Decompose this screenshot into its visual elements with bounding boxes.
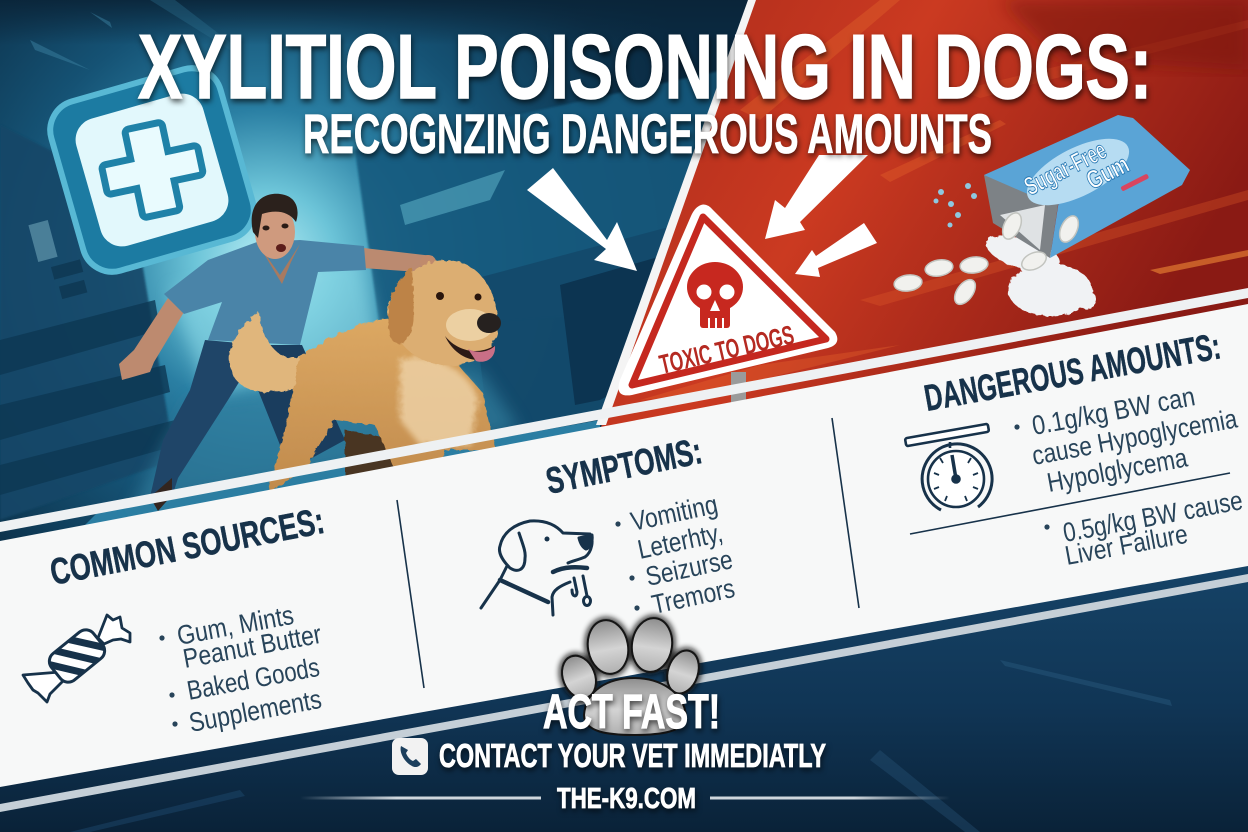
sugar crumbs [934, 183, 977, 228]
list: Peanut Butter [181, 619, 324, 674]
list: 0.1g/kg BW can [1030, 381, 1197, 441]
diagonal divider [596, 0, 756, 425]
list: Hypolglycema [1045, 442, 1191, 498]
heading: SYMPTOMS: [542, 430, 705, 502]
arrow: pointing to sign from top right [765, 155, 868, 239]
list: Leterhty, [635, 518, 725, 565]
illustration: sugar-free gum packet: Sugar-Free [1019, 135, 1111, 201]
panel: common sources [23, 500, 327, 738]
call to action: ACT FAST! [543, 686, 720, 739]
list: Tremors [649, 573, 737, 620]
right red scene background [600, 0, 1248, 430]
illustration: sugar-free gum packet [893, 115, 1190, 316]
icon: sign post [731, 372, 746, 408]
panel: dangerous amounts [905, 325, 1245, 571]
sign label: TOXIC TO DOGS [657, 320, 797, 380]
contact line: CONTACT YOUR VET IMMEDIATLY [439, 737, 826, 774]
top stripe of info panel [0, 288, 1248, 532]
website: THE-K9.COM [557, 783, 696, 815]
bottom navy band [0, 555, 1248, 832]
list: Gum, Mints [175, 600, 296, 651]
illustration: sugar-free gum packet: Gum [1081, 149, 1134, 195]
heading: COMMON SOURCES: [47, 500, 327, 593]
icon: skull [687, 262, 743, 329]
list [615, 489, 737, 620]
arrow: pointing to sign from left [527, 168, 637, 271]
list: Seizurse [643, 544, 735, 592]
list: Liver Failure [1063, 519, 1190, 571]
list: Baked Goods [185, 652, 322, 706]
dog face [436, 292, 501, 362]
info panel [0, 304, 1248, 787]
icon: drooling dog [481, 521, 592, 615]
list: Vomiting [628, 489, 720, 537]
icon: silver paw [552, 612, 708, 735]
panel: symptoms [481, 430, 737, 620]
icon: phone [392, 738, 428, 775]
icon: kitchen scale [905, 424, 992, 510]
arrow: pointing to sign from right [795, 223, 877, 277]
icon: candy [23, 615, 130, 702]
illustration: golden retriever [229, 260, 498, 492]
website [300, 783, 950, 815]
pills [893, 210, 1082, 308]
list [159, 600, 324, 738]
list: Supplements [187, 684, 324, 738]
list [910, 381, 1245, 571]
icon: medical cross badge [43, 61, 261, 279]
left blue scene background [0, 0, 770, 560]
warning sign: toxic to dogs [618, 205, 837, 395]
spilled powder [982, 229, 1097, 316]
illustration: worried owner [119, 194, 436, 511]
